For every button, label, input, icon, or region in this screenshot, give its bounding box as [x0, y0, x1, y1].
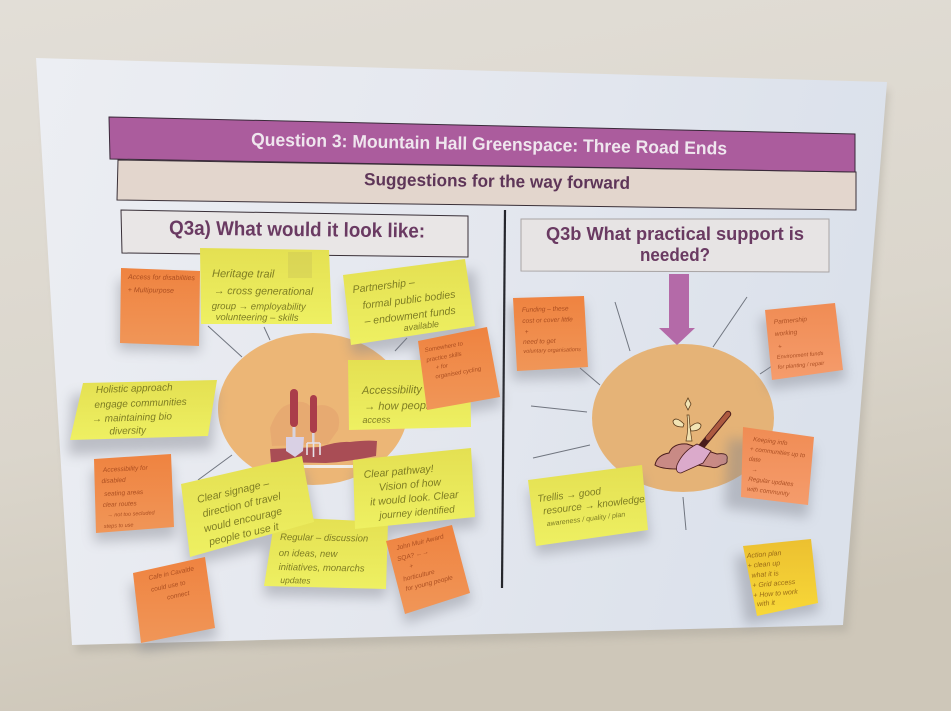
sticky: regular updates: on ideas, new	[279, 548, 339, 560]
sticky: clear pathway: Clear pathway!	[363, 463, 434, 481]
sticky: keeping informed: →	[751, 466, 758, 474]
heading: Q3b	[521, 219, 829, 272]
sticky: clear signage	[181, 456, 314, 557]
sticky: funding: voluntary organisations	[523, 347, 581, 355]
heading: Q3b: needed?	[640, 245, 710, 265]
sticky: partnership: – endowment funds	[363, 305, 457, 328]
sticky: holistic approach: → maintaining bio	[92, 411, 173, 425]
sticky: John Muir award: SQA? ←→	[397, 549, 429, 563]
sticky: clear signage: people to use it	[207, 520, 281, 549]
sticky: keeping informed	[741, 427, 814, 505]
sticky: action plan	[743, 539, 818, 616]
sticky shadows	[68, 270, 846, 652]
sticky: heritage trail: → cross generational	[214, 285, 314, 298]
sticky: access for disabled	[120, 268, 200, 346]
sticky: trellis	[528, 465, 648, 546]
arrow pointing down	[659, 274, 695, 345]
sticky: accessibility for cyclists	[94, 454, 174, 533]
sticky: cafe: connect	[166, 590, 191, 602]
sticky: funding	[513, 296, 588, 371]
sticky: John Muir award: for young people	[405, 574, 454, 593]
sticky: action plan: + How to work	[753, 589, 799, 600]
sticky: action plan: + Grid access	[752, 579, 796, 590]
sticky: trellis: resource → knowledge	[543, 494, 646, 517]
sticky: heritage trail: Heritage trail	[212, 268, 274, 281]
sticky: accessibility for cyclists: clear routes	[103, 500, 138, 509]
sticky: heritage trail: volunteering – skills	[216, 312, 299, 324]
sticky: clear pathway	[353, 448, 475, 529]
sticky: heritage trail	[200, 248, 332, 324]
centre divider	[502, 210, 505, 588]
sticky: partnership working: Environment funds	[777, 351, 824, 361]
subtitle: Suggestions for the way forward	[364, 169, 630, 193]
sticky: John Muir award: +	[409, 563, 414, 570]
sticky: keeping informed: + communities up to	[750, 446, 806, 460]
sticky: practice skills: Somewhere to	[424, 341, 463, 354]
sticky: cafe: Cafe in Cavalde	[148, 565, 195, 582]
sticky: partnership working: working	[775, 329, 798, 338]
sticky: trellis: awareness / quality / plan	[546, 511, 626, 528]
sticky: clear pathway: Vision of how	[378, 476, 443, 494]
sticky: clear signage: would encourage	[203, 505, 284, 535]
sticky: John Muir award: John Muir Award	[396, 533, 444, 552]
sticky: practice skills: + for	[435, 363, 449, 371]
sticky: heritage trail: group → employability	[212, 301, 307, 313]
sticky: practice skills	[418, 327, 500, 410]
sticky: action plan: what it is	[751, 570, 780, 580]
sticky: holistic approach: Holistic approach	[96, 382, 173, 396]
sticky: clear pathway: it would look. Clear	[370, 489, 460, 509]
sticky: holistic approach: engage communities	[94, 397, 187, 411]
heading: Q3a: Q3a) What would it look like:	[169, 217, 425, 243]
sticky: clear signage: Clear signage –	[196, 478, 270, 506]
sticky: partnership working: +	[778, 343, 782, 351]
sticky: partnership: available	[403, 319, 440, 333]
sticky: John Muir award	[386, 525, 470, 614]
sticky: regular updates: Regular – discussion	[280, 532, 368, 545]
sticky: accessibility for cyclists: steps to use	[104, 522, 134, 530]
sticky: partnership working: for planting / repair	[778, 361, 826, 371]
sticky: accessibility for cyclists: disabled	[101, 477, 126, 485]
sticky: partnership working	[765, 303, 843, 380]
sticky: partnership working: Partnership	[774, 316, 807, 326]
sticky: trellis: Trellis → good	[537, 486, 602, 505]
heading: Q3b: Q3b What practical support is	[546, 223, 804, 244]
sticky: clear signage: direction of travel	[201, 490, 283, 520]
sticky: cafe	[133, 557, 215, 643]
sticky: holistic approach: diversity	[109, 425, 147, 438]
poster sheet	[36, 58, 889, 652]
sticky: action plan: Action plan	[747, 550, 782, 560]
sticky: funding: cost or cover little	[522, 316, 573, 325]
diagram: left circle with spokes	[198, 326, 408, 485]
sticky: keeping informed: Keeping info	[753, 436, 788, 447]
sticky: practice skills: practice skills	[425, 352, 462, 364]
sticky: John Muir award: horticulture	[403, 569, 436, 583]
title banner: Question 3: Mountain Hall Greenspace: Three Road Ends	[251, 129, 727, 159]
sticky: accessibility: → how people	[364, 400, 435, 413]
sticky: regular updates	[264, 517, 388, 589]
sticky: action plan: + clean up	[747, 560, 781, 570]
sticky: action plan: with it	[757, 600, 776, 608]
sticky: access for disabled: + Multipurpose	[128, 287, 174, 295]
sticky: funding: +	[525, 329, 529, 336]
sticky: cafe: could use to	[150, 579, 187, 594]
sticky: keeping informed: date	[748, 456, 762, 464]
heading: Q3a	[121, 210, 468, 257]
sticky: partnership: Partnership –	[352, 276, 415, 296]
sticky: accessibility for cyclists: Accessibility for	[103, 465, 148, 474]
sticky: access for disabled: Access for disabilities	[128, 274, 195, 282]
sticky: keeping informed: Regular updates	[748, 476, 794, 488]
icon: trowel and seedling	[655, 398, 728, 473]
sticky: regular updates: initiatives, monarchs	[278, 562, 365, 574]
sticky: clear pathway: journey identified	[377, 504, 456, 522]
icon: garden fork and trowel	[270, 389, 377, 468]
sticky: accessibility: Accessibility	[362, 384, 422, 397]
sticky: accessibility: access	[362, 414, 391, 425]
sticky: holistic approach	[70, 380, 217, 440]
sticky: practice skills: organised cycling	[435, 366, 482, 381]
sticky: funding: Funding – these	[522, 305, 569, 314]
sticky: partnership	[343, 259, 475, 345]
sticky: regular updates: updates	[280, 575, 311, 586]
sticky: accessibility	[348, 360, 471, 430]
sticky: accessibility for cyclists: → not too secluded	[107, 510, 156, 519]
title banner	[109, 117, 856, 210]
diagram: right circle with spokes	[531, 274, 774, 530]
sticky: funding: need to get	[523, 338, 557, 346]
sticky: keeping informed: with community	[747, 486, 791, 498]
sticky: accessibility for cyclists: seating areas	[104, 489, 144, 498]
sticky: partnership: formal public bodies	[362, 288, 457, 312]
